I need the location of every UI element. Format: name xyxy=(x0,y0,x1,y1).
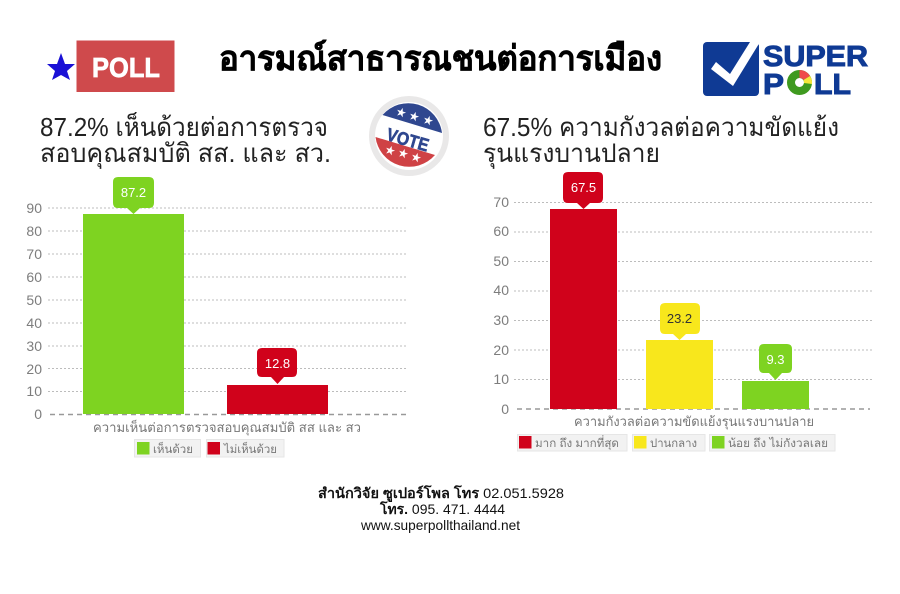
callout: 67.5 xyxy=(563,172,603,209)
bar: agree 87.2 xyxy=(83,214,184,414)
callout: 12.8: 12.8 xyxy=(265,356,290,371)
footer: contact text: www.superpollthailand.net xyxy=(360,517,520,533)
callout: 23.2 xyxy=(660,303,700,340)
legend: medium: ปานกลาง xyxy=(650,438,697,450)
bar chart: left xyxy=(26,177,407,457)
right y axis and grid: 0 xyxy=(501,401,509,417)
footer: contact text xyxy=(318,484,564,533)
left y axis and grid: 0 xyxy=(34,406,42,422)
heading: right chart: 67.5% ความกังวลต่อความขัดแย้ง xyxy=(483,112,839,142)
right y axis and grid: 30 xyxy=(493,312,509,328)
callout: 87.2: 87.2 xyxy=(121,185,146,200)
icon: poll badge xyxy=(76,40,174,92)
callout: 9.3 xyxy=(759,344,792,380)
left y axis and grid: 20 xyxy=(26,361,42,377)
bar: medium 23.2 xyxy=(646,340,713,409)
left y axis and grid: 80 xyxy=(26,223,42,239)
title: อารมณ์สาธารณชนต่อการเมือง xyxy=(219,39,662,78)
legend: low: น้อย ถึง ไม่กังวลเลย xyxy=(728,437,828,450)
logo: super poll xyxy=(703,41,868,101)
right y axis and grid xyxy=(493,194,873,417)
callout: 12.8 xyxy=(257,348,297,384)
right y axis and grid: 40 xyxy=(493,282,509,298)
icon: blue star xyxy=(47,53,75,80)
left y axis and grid: 30 xyxy=(26,338,42,354)
left axis title: ความเห็นต่อการตรวจสอบคุณสมบัติ สส และ สว xyxy=(93,418,361,436)
left y axis and grid: 70 xyxy=(26,246,42,262)
heading: left chart xyxy=(40,111,331,169)
heading: left chart: สอบคุณสมบัติ สส. และ สว. xyxy=(40,138,331,169)
logo check box xyxy=(703,42,760,96)
right y axis and grid: 20 xyxy=(493,342,509,358)
bar: low 9.3 xyxy=(742,381,809,409)
callout: 67.5: 67.5 xyxy=(571,180,596,195)
legend: agree: เห็นด้วย xyxy=(153,441,193,456)
left y axis and grid: 90 xyxy=(26,200,42,216)
logo word poll: LL xyxy=(814,69,851,101)
bar chart: right xyxy=(493,172,873,451)
left y axis and grid: 60 xyxy=(26,269,42,285)
icon: vote badge: ★ xyxy=(396,148,409,161)
legend: low xyxy=(710,434,835,451)
legend: high: มาก ถึง มากที่สุด xyxy=(535,435,619,450)
icon: vote badge: ★ xyxy=(409,152,422,165)
heading: right chart: รุนแรงบานปลาย xyxy=(483,138,660,169)
logo word super: SUPER xyxy=(763,41,868,73)
heading: left chart: 87.2% เห็นด้วยต่อการตรวจ xyxy=(40,111,328,142)
bar: disagree 12.8 xyxy=(227,385,328,414)
left y axis and grid: 10 xyxy=(26,383,42,399)
left y axis and grid xyxy=(26,200,407,422)
right y axis and grid: 10 xyxy=(493,371,509,387)
right y axis and grid: 50 xyxy=(493,253,509,269)
legend: disagree: ไม่เห็นด้วย xyxy=(223,441,277,456)
logo word poll: P xyxy=(763,69,784,101)
callout: 9.3: 9.3 xyxy=(766,352,785,367)
right axis title: ความกังวลต่อความขัดแย้งรุนแรงบานปลาย xyxy=(574,414,814,430)
icon: poll badge: POLL xyxy=(92,52,160,83)
left y axis and grid: 40 xyxy=(26,315,42,331)
legend: agree xyxy=(134,440,200,457)
icon: vote badge xyxy=(369,96,449,176)
footer: contact text: สำนักวิจัย ซูเปอร์โพล โทร 02.051.5928 xyxy=(318,484,564,502)
legend: medium xyxy=(632,434,705,451)
logo word poll xyxy=(763,69,851,101)
legend: disagree xyxy=(206,440,284,457)
icon: vote badge: ★ xyxy=(421,115,434,128)
icon: vote badge: ★ xyxy=(407,111,420,124)
bar: high 67.5 xyxy=(550,209,617,409)
icon: vote badge: ★ xyxy=(383,145,396,158)
callout: 23.2: 23.2 xyxy=(667,311,692,326)
legend: high xyxy=(518,434,627,451)
icon: vote badge: VOTE xyxy=(384,124,431,156)
heading: right chart xyxy=(483,112,839,169)
footer: contact text: โทร. 095. 471. 4444 xyxy=(379,500,505,517)
right y axis and grid: 60 xyxy=(493,223,509,239)
callout: 87.2 xyxy=(113,177,154,214)
right y axis and grid: 70 xyxy=(493,194,509,210)
icon: vote badge: ★ xyxy=(394,107,407,120)
left y axis and grid: 50 xyxy=(26,292,42,308)
